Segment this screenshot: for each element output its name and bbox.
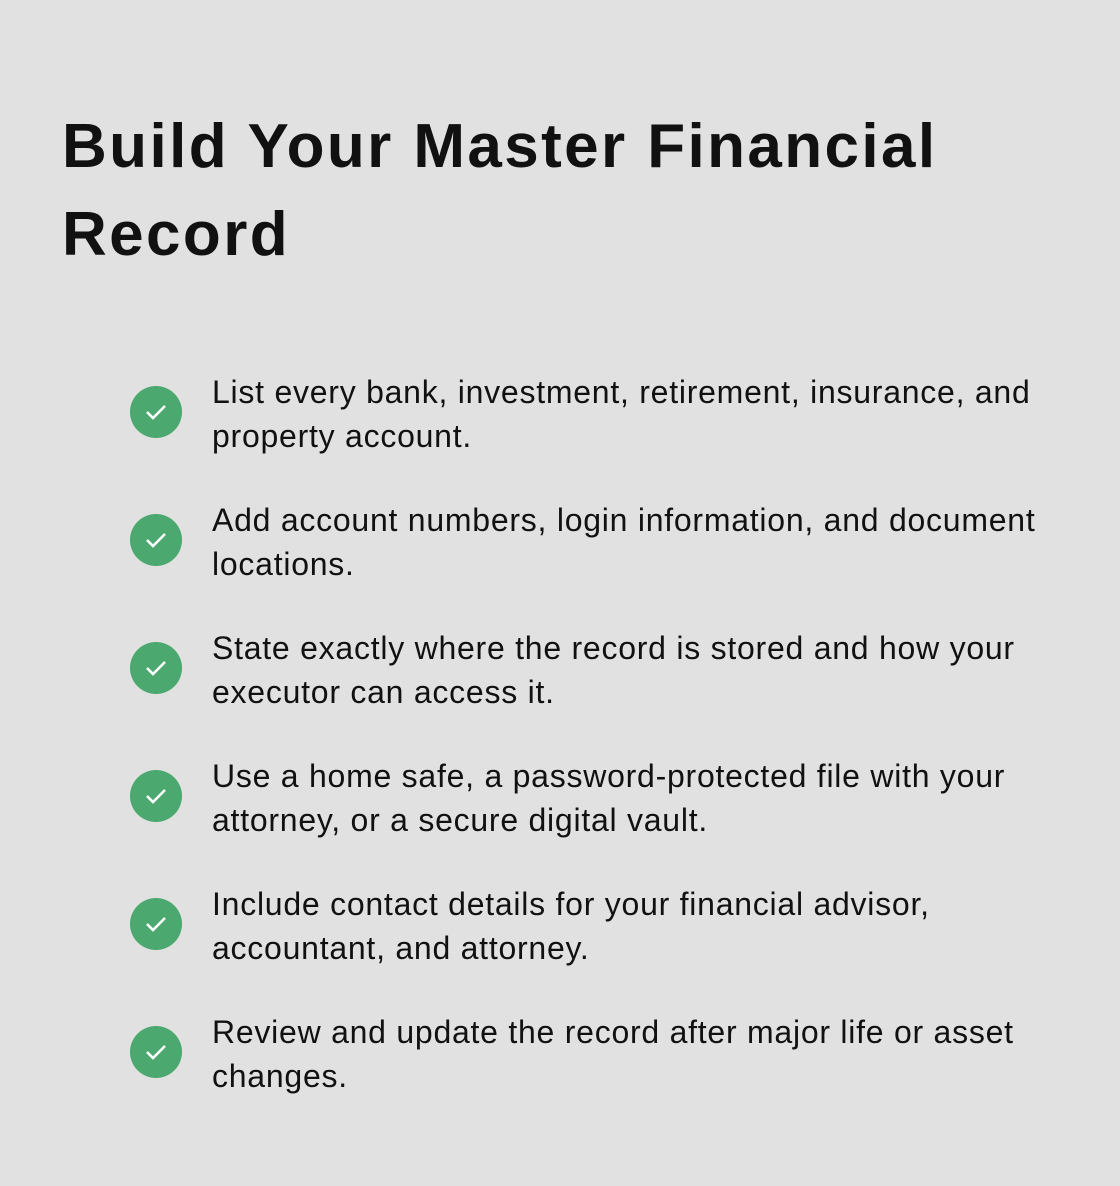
item 3: State exactly where the record is stored and how your xyxy=(212,630,1015,666)
title: Record xyxy=(62,200,290,269)
item 1 xyxy=(130,374,1031,454)
title xyxy=(62,112,938,269)
item 5: accountant, and attorney. xyxy=(212,930,590,966)
item 2: Add account numbers, login information, and document xyxy=(212,502,1035,538)
item 4 xyxy=(130,758,1005,838)
icon: check xyxy=(130,386,182,438)
item 1: List every bank, investment, retirement, insurance, and xyxy=(212,374,1031,410)
item 3: executor can access it. xyxy=(212,674,555,710)
title: Build Your Master Financial xyxy=(62,112,938,181)
icon: check xyxy=(130,770,182,822)
item 6: changes. xyxy=(212,1058,348,1094)
icon: check xyxy=(130,1026,182,1078)
icon: check xyxy=(130,642,182,694)
item 6 xyxy=(130,1014,1014,1094)
item 3 xyxy=(130,630,1015,710)
icon: check xyxy=(130,514,182,566)
item 6: Review and update the record after major life or asset xyxy=(212,1014,1014,1050)
item 4: Use a home safe, a password-protected file with your xyxy=(212,758,1005,794)
item 5 xyxy=(130,886,930,966)
item 5: Include contact details for your financial advisor, xyxy=(212,886,930,922)
item 2 xyxy=(130,502,1035,582)
item 4: attorney, or a secure digital vault. xyxy=(212,802,708,838)
icon: check xyxy=(130,898,182,950)
item 1: property account. xyxy=(212,418,472,454)
item 2: locations. xyxy=(212,546,355,582)
